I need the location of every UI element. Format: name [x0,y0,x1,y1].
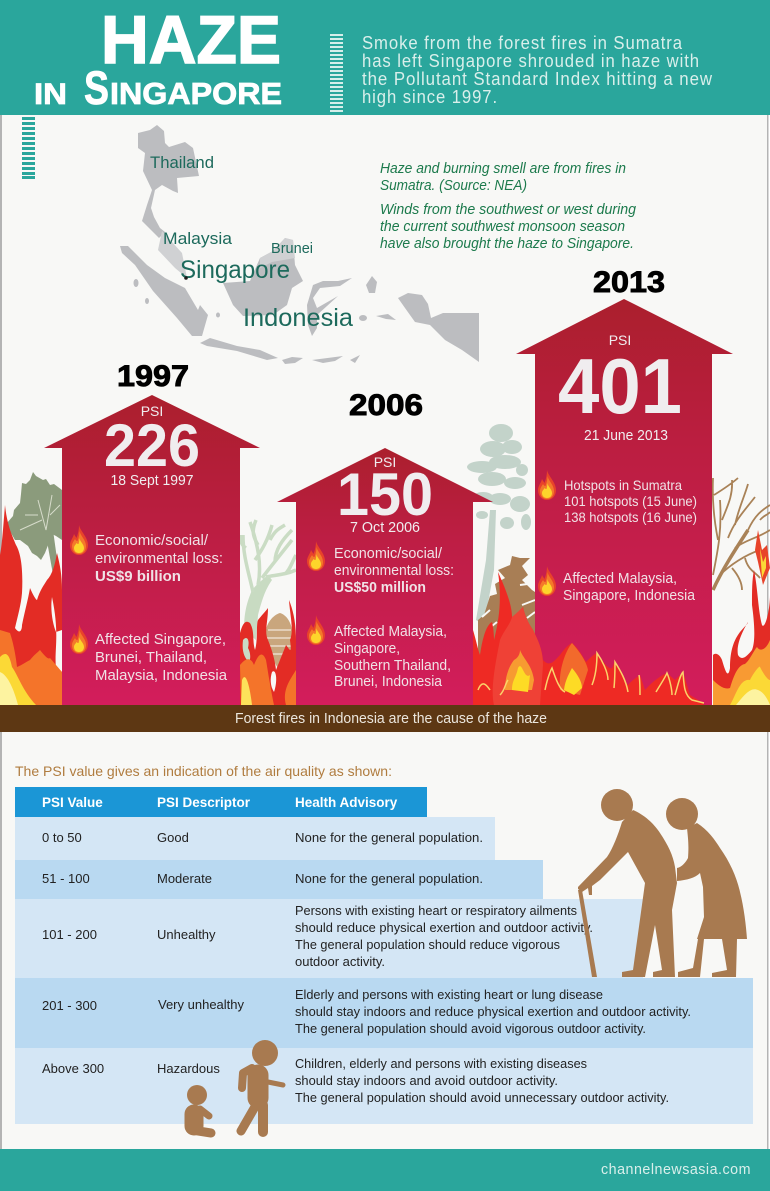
row: 201 - 300: 201 - 300 [42,998,97,1013]
source note [380,161,636,252]
source note: Sumatra. (Source: NEA) [380,178,527,194]
loss: Economic/social/ [95,532,209,549]
hotspots: 101 hotspots (15 June) [564,493,697,509]
row: 101 - 200: Persons with existing heart or respiratory ailments [295,903,577,918]
PSI reading 226: 18 Sept 1997 [110,472,194,489]
affected [563,571,696,604]
year 2013: 2013 [593,266,665,299]
table header: PSI Descriptor [157,795,251,810]
title: S [84,61,109,114]
header intro text: high since 1997. [362,87,498,107]
affected: Brunei, Thailand, [95,649,207,666]
fire: centre [473,572,704,705]
map labels: Brunei [271,240,313,257]
PSI reading 150: 7 Oct 2006 [350,519,420,536]
affected: Malaysia, Indonesia [95,667,228,684]
loss: US$9 billion [95,568,181,585]
fire: left [0,505,62,705]
map: land shapes [120,125,479,364]
PSI reading 226: 226 [104,412,200,479]
affected: Singapore, [334,641,400,657]
map labels: Malaysia [163,229,233,248]
row: 0 to 50: Good [157,830,189,845]
icon: flame [70,624,88,654]
affected: Southern Thailand, [334,658,451,674]
row: above 300 [15,1048,753,1124]
affected: Affected Malaysia, [334,624,447,640]
map labels: Indonesia [243,304,353,332]
loss: US$50 million [334,580,426,596]
tree: bare brown [713,478,770,590]
cause banner: Forest fires in Indonesia are the cause of the haze [235,711,547,727]
arrow: 2013 [516,266,733,705]
row: 51 - 100: 51 - 100 [42,871,90,886]
header intro text [362,33,713,107]
hotspots: 138 hotspots (16 June) [564,509,697,525]
tree: brown pine [478,556,535,660]
title: INGAPORE [110,76,282,111]
row: above 300: The general population should avoid unnecessary outdoor activity. [295,1090,669,1105]
hotspots [564,477,697,525]
source note: have also brought the haze to Singapore. [380,236,634,252]
tree: pale green [240,520,296,640]
pine cone [266,613,293,668]
affected: Brunei, Indonesia [334,674,443,690]
row: 101 - 200: should reduce physical exertion and outdoor activity. [295,920,593,935]
icon: flame [538,470,556,500]
affected [95,631,228,684]
arrow: 2006 [277,389,493,705]
teal stripes on paper [22,117,35,179]
icon: flame [307,541,325,571]
icon: baby [187,1085,211,1133]
icon: elderly couple [578,789,747,977]
title: HAZE [101,2,281,78]
row: 201 - 300 [15,978,753,1048]
row: above 300: Above 300 [42,1061,104,1076]
header intro text: has left Singapore shrouded in haze with [362,51,700,71]
icon: flame [70,525,88,555]
map labels [150,153,353,332]
row: above 300: Children, elderly and persons with existing diseases [295,1056,587,1071]
row: 0 to 50: 0 to 50 [42,830,82,845]
row: 51 - 100: Moderate [157,871,212,886]
row: 101 - 200 [15,899,643,978]
map labels: Thailand [150,153,214,172]
tree: left green [7,472,62,597]
cause banner [0,705,770,732]
PSI reading 401: 21 June 2013 [584,427,668,444]
row: 101 - 200: Unhealthy [157,927,216,942]
row: above 300: Hazardous [157,1061,220,1076]
loss [95,532,223,585]
title: IN [34,78,67,111]
header band [0,0,770,115]
table intro: The PSI value gives an indication of the air quality as shown: [15,763,392,779]
year 1997: 1997 [117,360,189,393]
table header: PSI Value [42,795,103,810]
arrow: 1997 [44,360,260,705]
hotspots: Hotspots in Sumatra [564,477,682,493]
affected [334,624,451,690]
fire: middle [240,600,296,705]
table header: Health Advisory [295,795,398,810]
PSI reading 226: PSI [141,403,163,419]
map of Southeast Asia [120,125,479,364]
source note: Winds from the southwest or west during [380,202,636,218]
icon: child [241,1040,283,1132]
table header [15,787,427,817]
PSI reading 401: 401 [558,342,682,430]
tree: tall pale pine [467,424,531,625]
row: 101 - 200: 101 - 200 [42,927,97,942]
source note: the current southwest monsoon season [380,219,625,235]
row: 51 - 100: None for the general population. [295,871,483,886]
footer band [0,1149,770,1191]
affected: Singapore, Indonesia [563,588,696,604]
row: 51 - 100 [15,860,543,899]
icon: flame [538,566,556,596]
header intro text: Smoke from the forest fires in Sumatra [362,33,683,53]
row: 201 - 300: Elderly and persons with existing heart or lung disease [295,987,603,1002]
row: 201 - 300: Very unhealthy [158,997,245,1012]
loss: environmental loss: [95,550,223,567]
PSI reading 150: PSI [374,454,396,470]
footer band: channelnewsasia.com [601,1162,751,1178]
row: 201 - 300: The general population should avoid vigorous outdoor activity. [295,1021,646,1036]
PSI reading 150: 150 [337,461,433,528]
PSI reading 401: PSI [609,332,631,348]
icon: flame [307,615,325,645]
loss: Economic/social/ [334,546,443,562]
affected: Affected Singapore, [95,631,226,648]
affected: Affected Malaysia, [563,571,677,587]
title [34,2,282,114]
row: 101 - 200: The general population should reduce vigorous [295,937,560,952]
source note: Haze and burning smell are from fires in [380,161,626,177]
loss: environmental loss: [334,563,454,579]
row: 0 to 50: None for the general population. [295,830,483,845]
year 2006: 2006 [349,389,423,422]
row: 0 to 50 [15,817,495,860]
fire: right [713,530,770,705]
loss [334,546,454,596]
row: above 300: should stay indoors and avoid outdoor activity. [295,1073,558,1088]
header stripes [330,34,343,112]
row: 201 - 300: should stay indoors and reduce physical exertion and outdoor activity. [295,1004,691,1019]
map labels: Singapore [180,256,290,284]
header intro text: the Pollutant Standard Index hitting a new [362,69,713,89]
row: 101 - 200: outdoor activity. [295,954,385,969]
table: PSI [15,787,753,1124]
map: Malaysia and Brunei light areas [158,231,295,278]
